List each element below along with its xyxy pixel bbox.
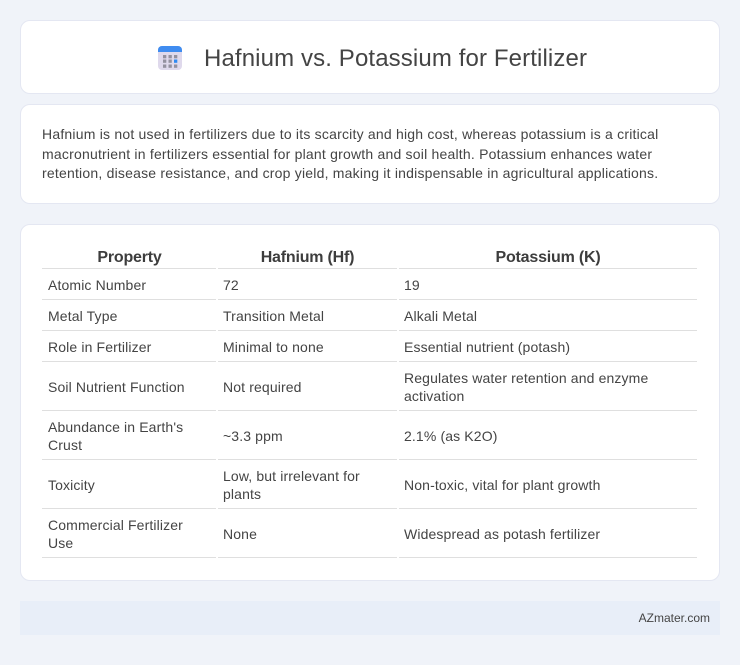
row: abundance: [48, 419, 498, 453]
table header: Potassium (K): [496, 249, 600, 266]
panel: title card: [20, 20, 720, 94]
row: metal type: Transition Metal: [223, 308, 324, 324]
row: atomic number: 19: [404, 277, 420, 293]
row: abundance: Abundance in Earth's: [48, 419, 183, 435]
row: soil nutrient function: Soil Nutrient Function: [48, 379, 185, 395]
row: soil nutrient function: Not required: [223, 379, 302, 395]
table header: [97, 249, 600, 266]
table header: Hafnium (Hf): [261, 249, 354, 266]
table header: Property: [97, 249, 162, 266]
row: toxicity: Toxicity: [48, 477, 95, 493]
row: commercial use: None: [223, 526, 257, 542]
icon: calendar: [158, 46, 182, 70]
title: Hafnium vs. Potassium for Fertilizer: [204, 45, 587, 72]
panel: summary: [20, 104, 720, 204]
footer: [20, 601, 720, 635]
row: commercial use: Widespread as potash fertilizer: [404, 526, 600, 542]
row: role in fertilizer: [48, 339, 570, 355]
row: atomic number: Atomic Number: [48, 277, 146, 293]
summary text: retention, disease resistance, and crop yield, making it indispensable in agricultural applications.: [42, 165, 658, 181]
row: role in fertilizer: Role in Fertilizer: [48, 339, 151, 355]
row: role in fertilizer: Essential nutrient (potash): [404, 339, 570, 355]
row: atomic number: [48, 277, 420, 293]
row: metal type: [48, 308, 477, 324]
row: role in fertilizer: Minimal to none: [223, 339, 324, 355]
row: toxicity: plants: [223, 486, 261, 502]
row: soil nutrient function: [48, 370, 648, 404]
row: metal type: Metal Type: [48, 308, 118, 324]
row: abundance: Crust: [48, 437, 82, 453]
summary text: macronutrient in fertilizers essential for plant growth and soil health. Potassium enhances water: [42, 146, 652, 162]
summary text: Hafnium is not used in fertilizers due to its scarcity and high cost, whereas potassium is a critical: [42, 126, 658, 142]
panel: comparison table: [20, 224, 720, 581]
row: metal type: Alkali Metal: [404, 308, 477, 324]
footer text: AZmater.com: [639, 611, 710, 625]
row: atomic number: 72: [223, 277, 239, 293]
row: toxicity: Low, but irrelevant for: [223, 468, 360, 484]
row: toxicity: Non-toxic, vital for plant growth: [404, 477, 600, 493]
row: commercial use: Use: [48, 535, 73, 551]
row: abundance: 2.1% (as K2O): [404, 428, 498, 444]
row: soil nutrient function: activation: [404, 388, 464, 404]
row: soil nutrient function: Regulates water retention and enzyme: [404, 370, 648, 386]
summary text: [42, 126, 658, 181]
row: commercial use: [48, 517, 600, 551]
row: abundance: ~3.3 ppm: [223, 428, 283, 444]
row: toxicity: [48, 468, 600, 502]
row: commercial use: Commercial Fertilizer: [48, 517, 183, 533]
